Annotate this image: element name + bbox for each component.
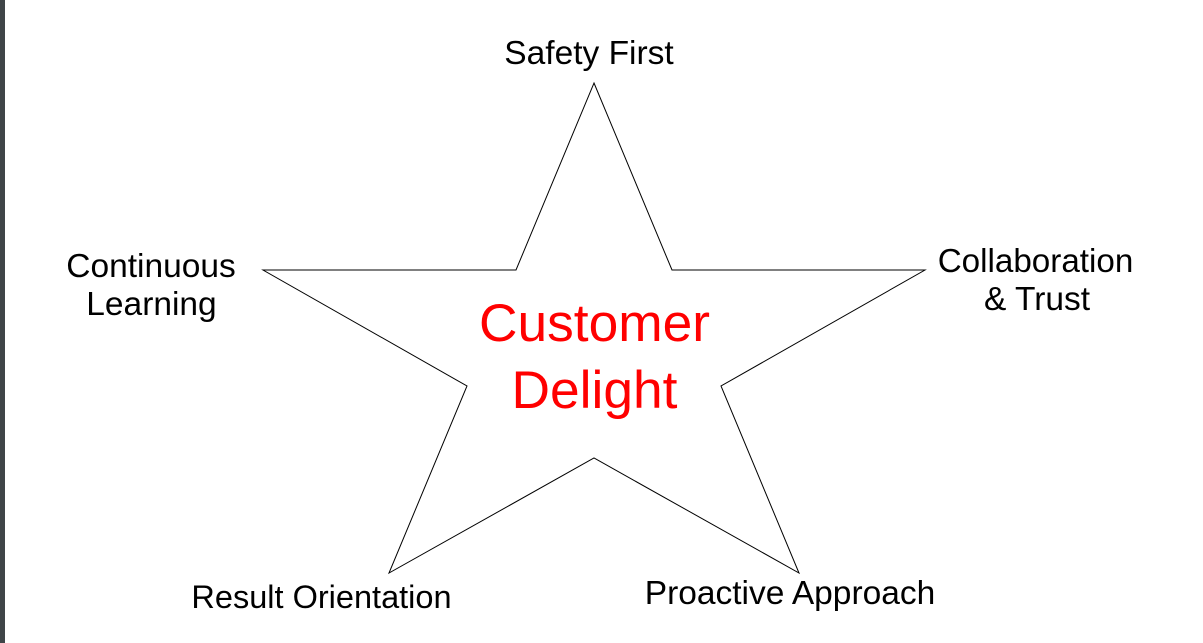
label: Continuous Learning: Learning bbox=[86, 286, 217, 323]
label: Collaboration & Trust: Collaboration bbox=[938, 243, 1133, 280]
label: Continuous Learning bbox=[66, 248, 236, 323]
center title: Customer Delight: Customer bbox=[479, 294, 710, 353]
center title: Customer Delight bbox=[479, 294, 710, 420]
label: Proactive Approach: Proactive Approach bbox=[645, 575, 935, 612]
label: Collaboration & Trust bbox=[938, 243, 1133, 318]
label: Result Orientation: Result Orientation bbox=[191, 579, 452, 615]
label: Collaboration & Trust: & Trust bbox=[984, 281, 1091, 318]
label: Continuous Learning: Continuous bbox=[66, 248, 236, 285]
label: Safety First: Safety First bbox=[504, 35, 674, 72]
center title: Customer Delight: Delight bbox=[512, 361, 678, 420]
star outline bbox=[263, 83, 925, 573]
